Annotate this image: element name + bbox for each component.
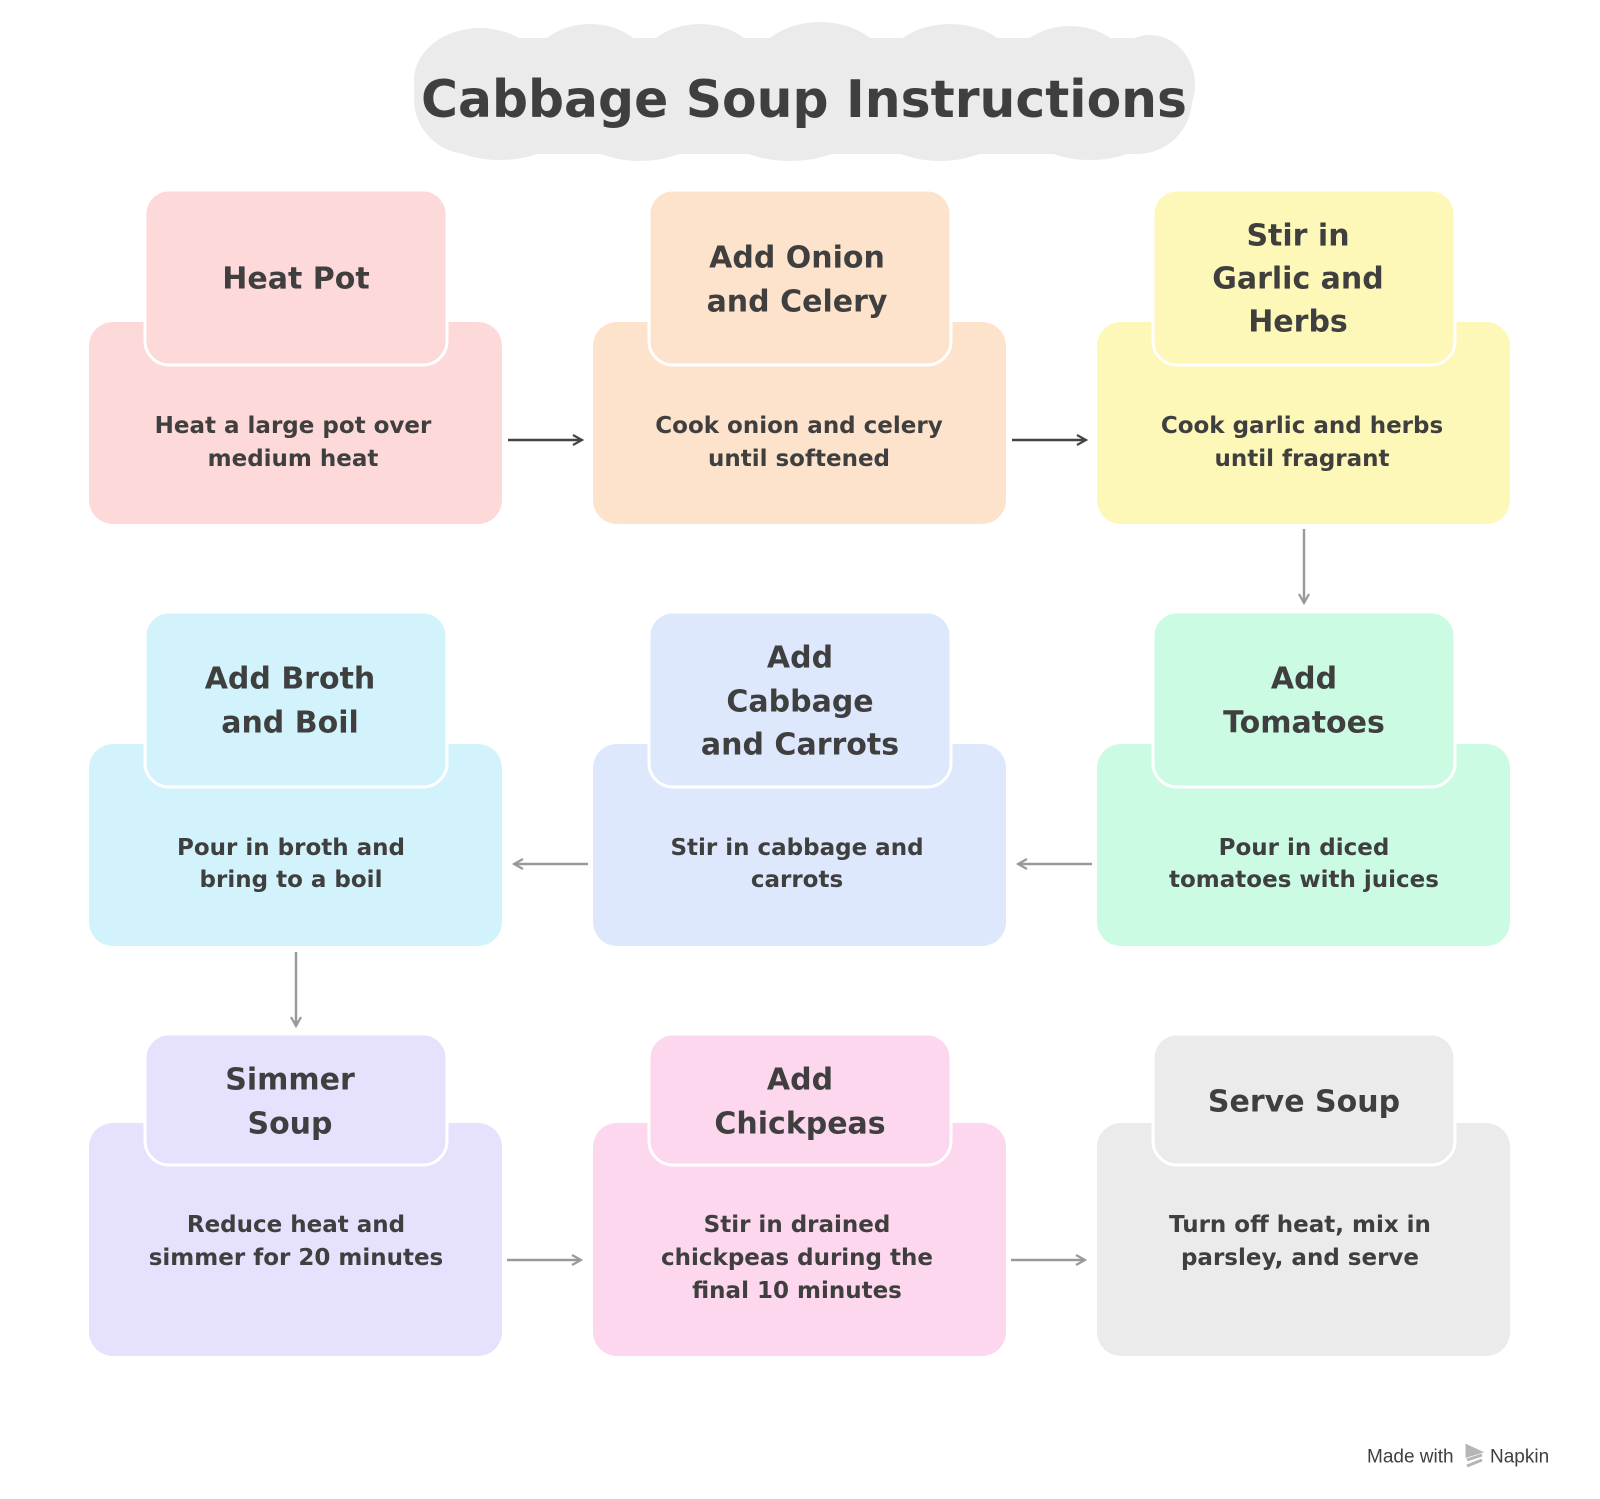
card: Simmer Soup: Reduce heat and [187, 1212, 405, 1238]
footer: made with napkin: Made with [1367, 1446, 1454, 1468]
card: Heat Pot [89, 190, 502, 524]
arrow: 2 to 3 [1012, 439, 1086, 441]
card: Heat Pot: Heat a large pot over [155, 413, 432, 439]
arrow: cabbage to broth [514, 863, 588, 865]
card: Add Cabbage and Carrots: carrots [751, 867, 843, 893]
card: Add Chickpeas [593, 1034, 1006, 1356]
card: Add Onion and Celery: and Celery [707, 284, 888, 320]
footer: made with napkin: Napkin [1490, 1446, 1549, 1468]
arrow: simmer to chickpeas [507, 1259, 581, 1261]
card: Add Chickpeas: Chickpeas [714, 1106, 886, 1142]
card: Stir in Garlic and Herbs: Garlic and [1212, 262, 1384, 296]
card: Add Tomatoes [1097, 612, 1510, 946]
title: Cabbage Soup Instructions [421, 70, 1187, 130]
card: Add Broth and Boil: Pour in broth and [177, 835, 405, 861]
card: Simmer Soup: Soup [247, 1106, 333, 1142]
title cloud [414, 22, 1195, 161]
card: Add Cabbage and Carrots: Add [767, 640, 833, 676]
card: Add Tomatoes: tomatoes with juices [1169, 867, 1439, 893]
card: Add Tomatoes: Tomatoes [1223, 706, 1385, 740]
card: Stir in Garlic and Herbs: Cook garlic and herbs [1161, 413, 1443, 439]
card: Add Tomatoes: Pour in diced [1219, 835, 1389, 861]
card: Add Cabbage and Carrots: and Carrots [701, 728, 899, 762]
title [414, 22, 1195, 161]
card: Add Chickpeas: final 10 minutes [692, 1278, 902, 1304]
card: Simmer Soup: Simmer [225, 1062, 355, 1098]
arrow: chickpeas to serve [1011, 1259, 1085, 1261]
card: Simmer Soup: simmer for 20 minutes [149, 1245, 443, 1271]
card: Add Cabbage and Carrots: Cabbage [726, 684, 874, 720]
footer: made with napkin [1367, 1446, 1549, 1468]
arrow: tomatoes to cabbage [1018, 863, 1092, 865]
card: Add Chickpeas: Stir in drained [704, 1212, 890, 1238]
card: Add Onion and Celery: Add Onion [709, 240, 885, 276]
card: Add Cabbage and Carrots: Stir in cabbage and [670, 835, 924, 861]
card: Serve Soup: parsley, and serve [1181, 1245, 1419, 1271]
card: Add Chickpeas: chickpeas during the [661, 1245, 933, 1271]
card: Add Broth and Boil: bring to a boil [200, 867, 382, 893]
card: Simmer Soup [89, 1034, 502, 1356]
card: Add Chickpeas: Add [767, 1062, 833, 1098]
card: Add Onion and Celery [593, 190, 1006, 524]
card: Stir in Garlic and Herbs [1097, 190, 1510, 524]
card: Add Broth and Boil [89, 612, 502, 946]
card: Add Tomatoes: Add [1271, 662, 1337, 696]
card: Add Onion and Celery: until softened [708, 446, 890, 472]
card: Stir in Garlic and Herbs: Herbs [1248, 304, 1348, 340]
arrow: 3 down to 4 [1303, 529, 1305, 603]
card: Serve Soup [1097, 1034, 1510, 1356]
card: Add Cabbage and Carrots [593, 612, 1006, 946]
arrow: broth down to simmer [295, 952, 297, 1026]
card: Add Broth and Boil: and Boil [221, 706, 359, 740]
card: Serve Soup: Turn off heat, mix in [1169, 1212, 1431, 1238]
card: Stir in Garlic and Herbs: until fragrant [1214, 446, 1390, 472]
card: Serve Soup: Serve Soup [1208, 1084, 1400, 1120]
card: Add Onion and Celery: Cook onion and celery [655, 413, 943, 439]
card: Heat Pot: Heat Pot [222, 262, 370, 296]
card: Add Broth and Boil: Add Broth [205, 662, 375, 696]
card: Heat Pot: medium heat [208, 446, 378, 472]
card: Stir in Garlic and Herbs: Stir in [1246, 218, 1350, 254]
arrow: 1 to 2 [508, 439, 582, 441]
